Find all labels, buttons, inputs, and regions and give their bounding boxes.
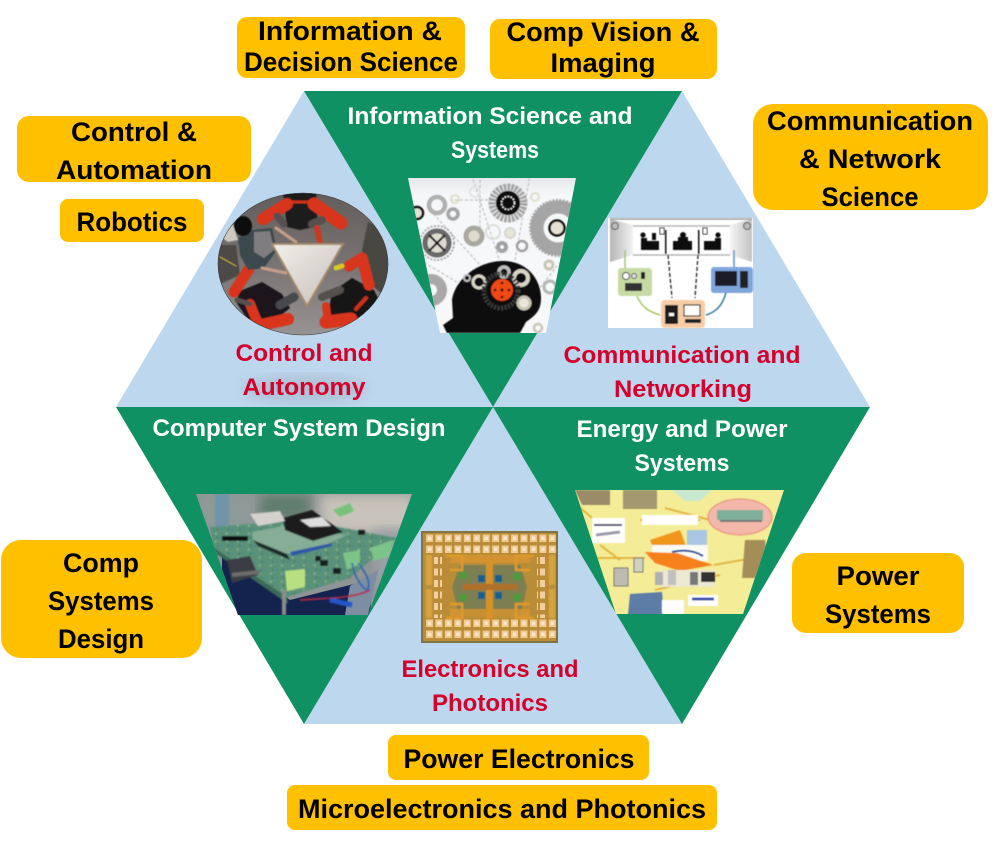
heading: Control and Autonomy: Control and — [236, 340, 372, 367]
tag: Information & Decision Science — [237, 16, 465, 78]
tag: Power Electronics: Power Electronics — [404, 744, 634, 774]
heading: Control and Autonomy: Autonomy — [242, 374, 366, 401]
photo: circuit boards — [196, 494, 412, 615]
tag: Power Systems: Power — [836, 561, 920, 591]
panel: electronics and photonics — [304, 407, 682, 724]
heading: Electronics and Photonics: Photonics — [432, 690, 548, 717]
photo: robots around a triangular table — [218, 193, 388, 335]
heading: Information Science and Systems: Information Science and — [348, 103, 632, 130]
tag: Communication & Network Science — [753, 104, 988, 212]
module — [252, 526, 347, 554]
heading: Information Science and Systems: Systems — [451, 137, 539, 164]
tag: Comp Vision & Imaging — [490, 17, 717, 79]
tag: Control & Automation: Control & — [71, 117, 197, 147]
right robot — [329, 278, 378, 318]
socket — [283, 510, 343, 541]
photo outline — [218, 193, 388, 335]
person — [238, 228, 277, 270]
heading: Energy and Power Systems — [576, 416, 788, 477]
top robot — [283, 193, 318, 230]
tag: Comp Systems Design — [1, 540, 202, 658]
tag: Information & Decision Science: Decision Science — [244, 47, 458, 77]
tag: Microelectronics and Photonics — [287, 785, 717, 830]
panel: computer system design — [116, 407, 493, 724]
heading: Communication and Networking: Networking — [614, 376, 752, 403]
heading: Communication and Networking — [564, 342, 800, 403]
heading: Computer System Design: Computer System Design — [152, 415, 446, 442]
heading: Electronics and Photonics — [402, 656, 578, 717]
heading: Control and Autonomy — [236, 340, 372, 403]
tag: Power Electronics — [388, 735, 649, 780]
tag: Comp Systems Design: Systems — [48, 586, 154, 616]
tag: Power Systems: Systems — [825, 599, 931, 629]
tag: Control & Automation — [17, 116, 251, 185]
left robot — [236, 282, 290, 320]
table — [272, 244, 343, 306]
main board — [210, 520, 397, 597]
heading: Electronics and Photonics: Electronics and — [402, 656, 578, 683]
heading: Information Science and Systems — [348, 103, 632, 164]
heading: Energy and Power Systems: Systems — [634, 450, 730, 477]
heading: Communication and Networking: Communication and — [564, 342, 800, 369]
panel: control and autonomy — [116, 91, 493, 407]
panel: information science and systems — [304, 91, 682, 407]
hexagon diagram — [116, 91, 870, 724]
diagram: networked office — [608, 218, 753, 328]
tag: Comp Systems Design: Comp — [63, 548, 139, 578]
tag: Microelectronics and Photonics: Microelectronics and Photonics — [298, 794, 706, 824]
tag: Communication & Network Science: Science — [822, 182, 918, 212]
tag: Robotics: Robotics — [76, 207, 188, 237]
panel: communication and networking — [493, 91, 870, 407]
tag: Robotics — [60, 199, 204, 242]
image: smart grid map — [575, 490, 784, 614]
image: gears and head — [408, 178, 576, 333]
silhouette — [443, 261, 541, 333]
tag: Information & Decision Science: Information & — [258, 16, 442, 46]
tag: Communication & Network Science: & Network — [799, 144, 942, 174]
tag: Comp Vision & Imaging: Imaging — [550, 48, 656, 78]
heading: Energy and Power Systems: Energy and Power — [576, 416, 788, 443]
tag: Control & Automation: Automation — [56, 155, 212, 185]
tag: Communication & Network Science: Communication — [767, 106, 973, 136]
image: chip layout — [421, 531, 558, 643]
tag: Comp Systems Design: Design — [58, 624, 144, 654]
tag: Power Systems — [792, 553, 964, 633]
soft shadow under label — [243, 375, 367, 403]
panel: energy and power systems — [493, 407, 870, 724]
tag: Comp Vision & Imaging: Comp Vision & — [506, 17, 700, 47]
